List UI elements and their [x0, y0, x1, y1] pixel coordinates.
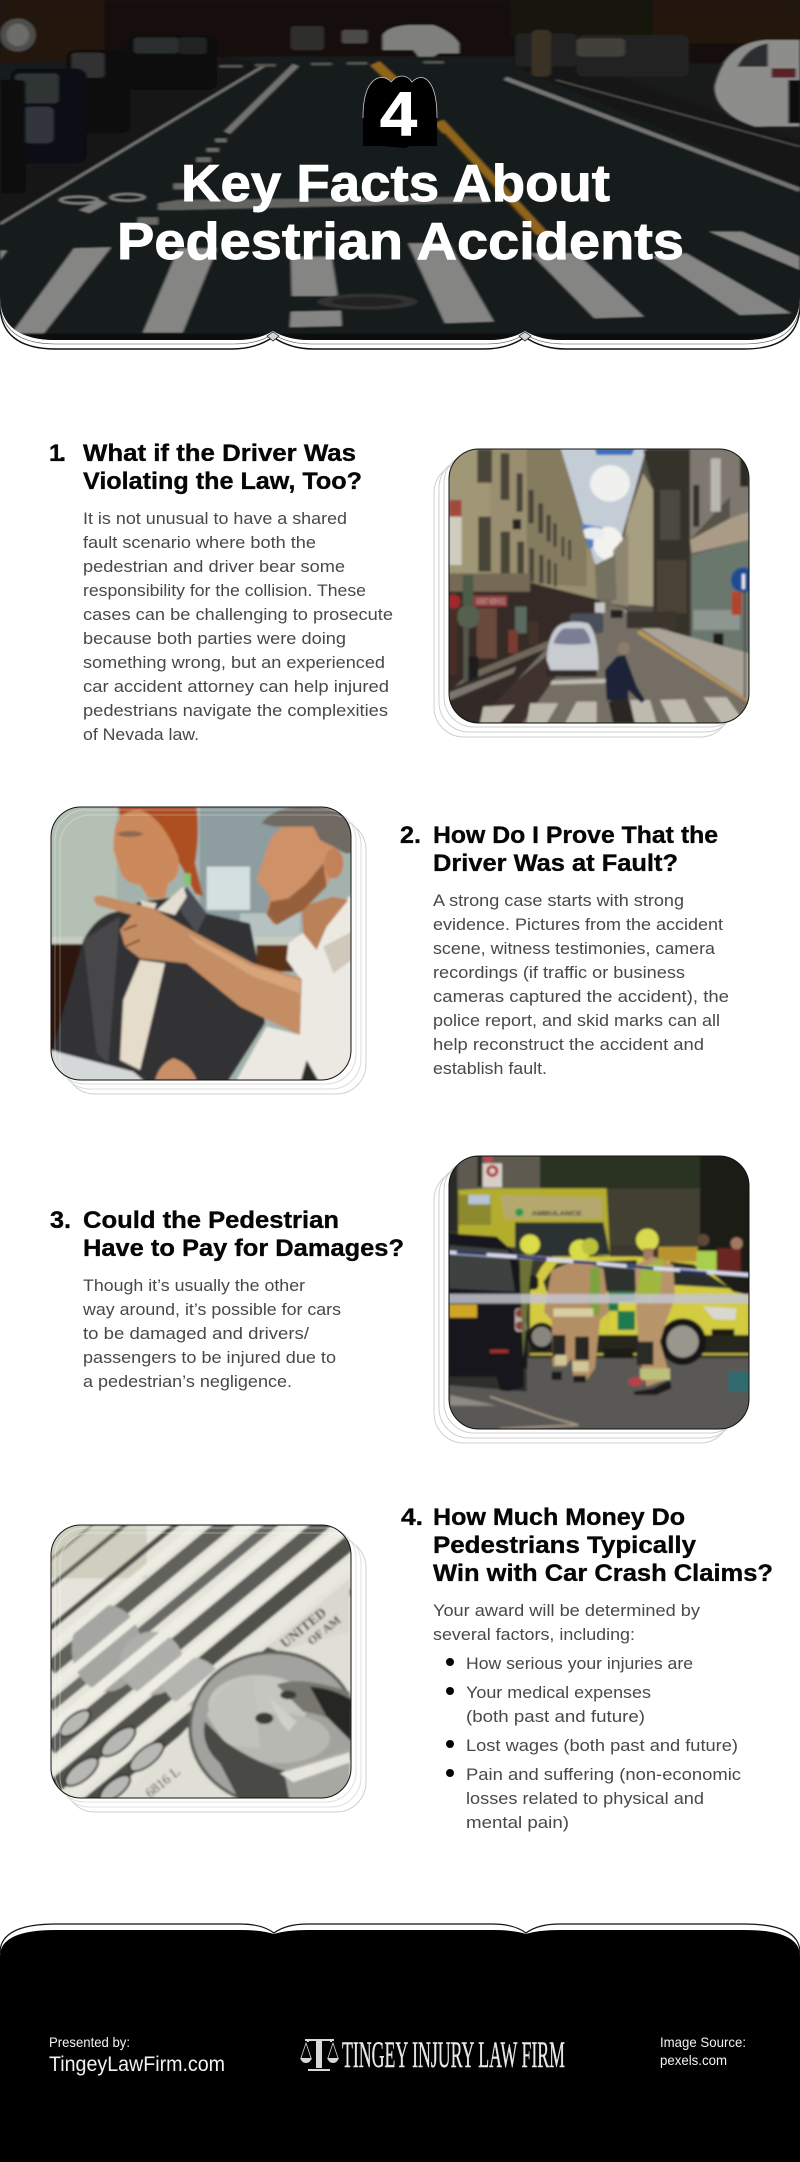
notch diamonds [267, 332, 531, 341]
far cars [291, 26, 324, 50]
body text 1 [83, 510, 393, 744]
dark engraved bands [50, 1339, 350, 1835]
photo stack 3: ambulance scene [434, 1152, 757, 1443]
body text 1: pedestrians navigate the complexities [83, 702, 388, 720]
ghost outlines over photo 2 [55, 810, 361, 1089]
people on sidewalk [627, 612, 677, 628]
left parked cars [128, 35, 217, 90]
footer [0, 1924, 800, 2162]
bullet list: (both past and future) [466, 1708, 645, 1726]
section 2 [47, 803, 729, 1094]
heading 1: What if the Driver Was [83, 440, 356, 467]
bystanders [658, 1247, 698, 1262]
body text 1: something wrong, but an experienced [83, 654, 385, 672]
photo stack 4: money: OF AM [305, 1613, 343, 1648]
body text 3 [82, 1277, 341, 1391]
body intro 4: several factors, including: [433, 1626, 635, 1644]
blazer [53, 887, 265, 1083]
police tape [449, 1252, 749, 1275]
lane lines [0, 65, 800, 224]
heading 1: Violating the Law, Too? [83, 468, 362, 495]
photo stack 4: money [47, 1339, 366, 1848]
section 1 [49, 440, 756, 744]
main title: Pedestrian Accidents [117, 213, 684, 271]
road [524, 606, 747, 722]
man's face [257, 822, 340, 925]
bullet list: losses related to physical and [466, 1790, 704, 1808]
body text 3: way around, it’s possible for cars [82, 1301, 341, 1319]
sky [560, 447, 648, 565]
heading 3: Have to Pay for Damages? [83, 1235, 404, 1262]
lower right bill [120, 1615, 350, 1802]
header scalloped outline [0, 304, 800, 349]
right white car [714, 40, 800, 127]
car [570, 613, 603, 633]
heading 3 [50, 1207, 404, 1262]
neck [302, 897, 348, 950]
right buildings [616, 450, 730, 636]
seal arcs [72, 1605, 142, 1692]
heading 2 [400, 822, 718, 877]
yellow car [530, 1257, 749, 1355]
firefighter 1 [520, 1234, 540, 1254]
footer image source: Image Source: [660, 2034, 746, 2050]
man's shirt [237, 895, 352, 1083]
laptop + lower hand [50, 1050, 147, 1083]
body text 1: It is not unusual to have a shared [83, 510, 347, 528]
bullet list [446, 1655, 741, 1832]
body text 2: A strong case starts with strong [433, 892, 684, 910]
heading 4: Win with Car Crash Claims? [433, 1560, 773, 1587]
header banner [0, 0, 800, 349]
footer image source [660, 2034, 746, 2068]
body text 1: of Nevada law. [83, 726, 199, 744]
Franklin portrait [190, 1652, 357, 1804]
body text 3: a pedestrian’s negligence. [83, 1373, 292, 1391]
left shops [447, 577, 600, 693]
body text 2: police report, and skid marks can all [433, 1012, 720, 1030]
stop bar + bike marking [158, 197, 490, 210]
body text 2: recordings (if traffic or business [433, 964, 685, 982]
bullet list: Lost wages (both past and future) [466, 1737, 738, 1755]
pedestrian [617, 642, 630, 655]
double yellow line [375, 63, 542, 233]
body text 1: responsibility for the collision. These [83, 582, 366, 600]
body intro 4 [433, 1602, 701, 1644]
header inner scalloped outline [0, 300, 800, 344]
icon: scales of justice [300, 2040, 339, 2071]
photo stack 4: money: 6816 L [143, 1765, 184, 1801]
ghost outlines over photo 4 [55, 1528, 361, 1807]
footer black panel [0, 1930, 800, 2162]
body text 3: to be damaged and drivers/ [83, 1325, 309, 1343]
cones / bag [628, 1377, 643, 1386]
body text 1: fault scenario where both the [83, 534, 316, 552]
bullet list: Your medical expenses [466, 1684, 651, 1702]
road [447, 1358, 753, 1432]
left building [489, 450, 598, 600]
section 3 [50, 1152, 757, 1443]
body text 2: evidence. Pictures from the accident [433, 916, 723, 934]
heading 2: Driver Was at Fault? [433, 850, 678, 877]
bullet list: Pain and suffering (non-economic [466, 1766, 741, 1784]
shirt [120, 960, 165, 1070]
white bill edges [50, 1401, 350, 1848]
bullet list: mental pain) [466, 1814, 569, 1832]
footer presented by: Presented by: [49, 2034, 130, 2050]
footer presented by: TingeyLawFirm.com [49, 2053, 225, 2076]
body text 2: cameras captured the accident), the [433, 988, 729, 1006]
body intro 4: Your award will be determined by [433, 1602, 701, 1620]
body text 2: help reconstruct the accident and [433, 1036, 704, 1054]
black car [449, 1233, 527, 1391]
footer scalloped outline [0, 1924, 800, 1953]
heading 3: 3. [50, 1207, 71, 1234]
photo stack 3: ambulance scene: AMBULANCE [532, 1211, 582, 1218]
body text 3: passengers to be injured due to [83, 1349, 336, 1367]
footer presented by [49, 2034, 225, 2076]
body text 1: because both parties were doing [83, 630, 346, 648]
body text 2: scene, witness testimonies, camera [433, 940, 716, 958]
body text 1: cases can be challenging to prosecute [83, 606, 393, 624]
footer: TINGEY INJURY LAW FIRM [342, 2035, 565, 2076]
crosswalk [0, 232, 800, 334]
header photo: dark street crosswalk [0, 0, 800, 347]
body text 3: Though it’s usually the other [83, 1277, 306, 1295]
badge: number 4: 4 [380, 80, 418, 149]
footer logo [300, 2035, 565, 2076]
sign [730, 566, 748, 594]
body text 2 [433, 892, 729, 1078]
photo stack 4: money: UNITED [278, 1606, 330, 1651]
heading 4: How Much Money Do [433, 1504, 685, 1531]
body text 1: pedestrian and driver bear some [83, 558, 345, 576]
heading 2: How Do I Prove That the [433, 822, 718, 849]
heading 1: 1. [49, 440, 66, 467]
heading 4: Pedestrians Typically [433, 1532, 697, 1559]
badge: number 4 [363, 76, 437, 149]
bullet list: How serious your injuries are [466, 1655, 693, 1673]
far street [595, 555, 617, 600]
photo stack 1: Lisbon street: JURST SERVICE [476, 597, 505, 606]
heading 1 [49, 440, 362, 495]
firefighter 2 [636, 1229, 659, 1251]
heading 4: 4. [401, 1504, 423, 1531]
main title: Key Facts About [181, 155, 610, 213]
photo stack 2: office meeting [47, 803, 366, 1094]
heading 4 [401, 1504, 773, 1587]
section 4 [47, 1339, 773, 1848]
heading 2: 2. [400, 822, 421, 849]
main title [117, 155, 684, 271]
ambulance [458, 1188, 610, 1257]
arm + hand [93, 896, 302, 1035]
woman hair [118, 807, 203, 897]
heading 3: Could the Pedestrian [83, 1207, 339, 1234]
body text 2: establish fault. [433, 1060, 547, 1078]
photo stack 1: Lisbon street [434, 447, 756, 737]
body text 1: car accident attorney can help injured [83, 678, 389, 696]
woman face [113, 810, 179, 898]
crosswalk [480, 679, 745, 723]
bill ovals [56, 1706, 168, 1806]
footer image source: pexels.com [660, 2052, 727, 2068]
